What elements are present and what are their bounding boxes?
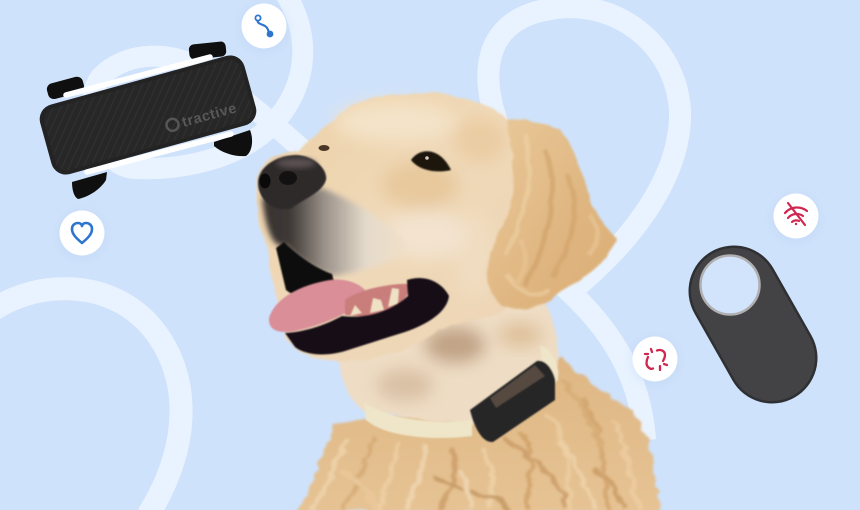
eyes [318,145,451,171]
mouth [269,242,449,354]
tongue [269,280,365,332]
icon: broken link [632,336,678,382]
ear [488,119,617,309]
device straps [66,57,231,172]
dog [256,92,660,510]
neck tracker on collar [470,361,555,442]
ribbon: lower-left arc [0,289,181,510]
icon: route [242,4,286,48]
tractive GPS device [36,41,260,199]
icon: heart [60,210,104,256]
ribbon: top-left loop [92,0,312,169]
muzzle [262,188,408,276]
upper mouth opening [276,242,336,300]
gums and teeth [345,284,410,318]
device logo [165,117,180,132]
collar band [364,345,558,438]
ribbon: centre-right loop [488,7,680,440]
ear fur detail [505,135,598,294]
lower lip [285,278,449,354]
Bluetooth tag [700,256,772,358]
device body [36,52,260,178]
forehead shading [335,102,506,300]
device clips [46,41,252,199]
dog neck [338,295,558,425]
icon: no signal [774,194,818,238]
nose [258,155,326,209]
dog body fur [298,357,660,510]
device body: tractive [180,100,239,131]
head [256,92,545,360]
